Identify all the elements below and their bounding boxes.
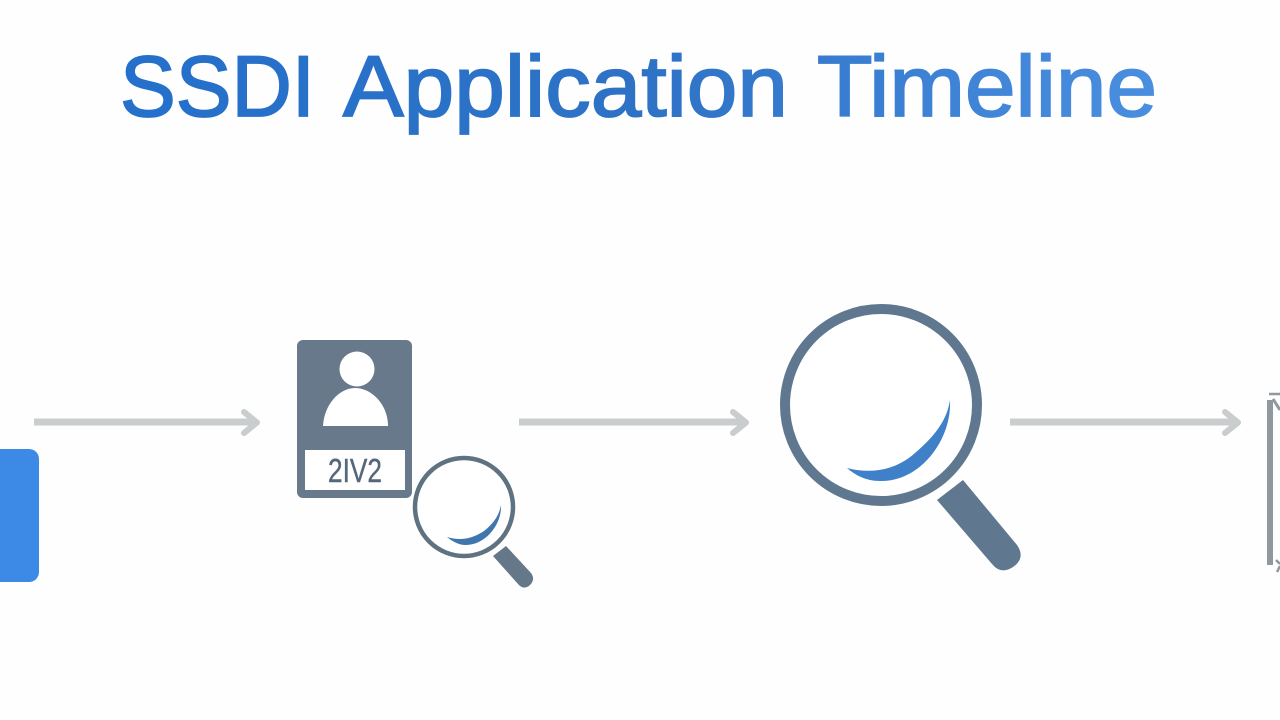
icon: ID card with photo and code: [297, 340, 412, 498]
title: SSDI: [120, 39, 315, 135]
icon: small magnifying glass: [415, 458, 533, 588]
arrow 3: [1010, 412, 1238, 433]
arrow 2: [519, 412, 746, 433]
icon: large magnifying glass: [785, 309, 1021, 570]
title: Application: [343, 39, 788, 135]
step 1 card: blue box cropped at left edge: [0, 449, 39, 582]
ID card code: 2IV2: [328, 452, 382, 489]
icon: document cropped at right edge: [1269, 394, 1280, 572]
arrow 1: [34, 412, 257, 433]
title: [120, 39, 1157, 135]
title: Timeline: [817, 39, 1157, 135]
